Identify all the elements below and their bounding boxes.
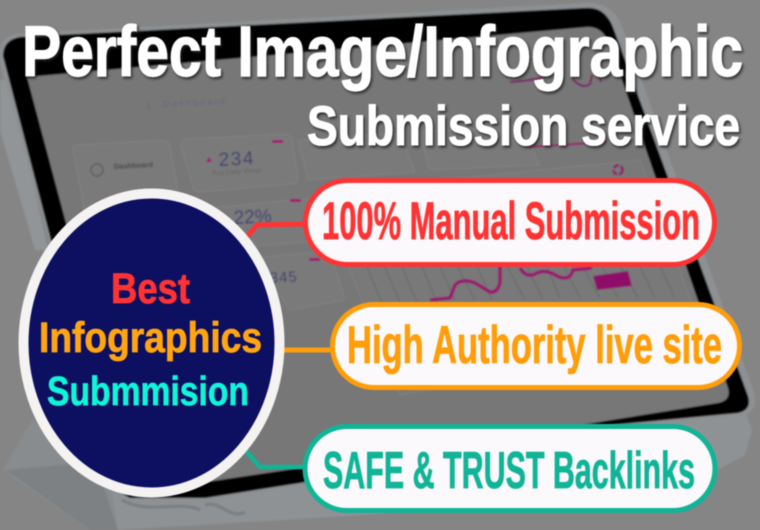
connector: orange: [282, 348, 333, 352]
dashboard heading: Dashboard: [163, 96, 225, 110]
chart tag: [593, 271, 632, 290]
card values: 345: [269, 269, 298, 287]
connector: red: [246, 224, 306, 238]
refresh icon: [614, 166, 622, 174]
header purple mark: [510, 70, 601, 86]
upper chart line: [527, 142, 607, 147]
card values: Dashboard: [114, 160, 154, 171]
chart line: [430, 262, 592, 300]
card values: Avg Daily Views: [212, 167, 262, 177]
dashboard heading: 1: [146, 100, 152, 111]
badge line: infographics: Infographics: [39, 314, 262, 362]
connector: teal: [246, 451, 305, 467]
badge: best infographics submission: [24, 194, 280, 492]
badge line: submmision: Submmision: [47, 368, 249, 414]
callout: high authority: [332, 304, 740, 388]
card values: 22%: [233, 206, 272, 229]
chart grid: [365, 262, 675, 310]
badge line: best: Best: [111, 265, 190, 313]
callout: manual submission: [306, 180, 714, 264]
dashboard cards: [72, 125, 705, 395]
card values: [91, 140, 320, 287]
title: [22, 13, 743, 157]
card values: 234: [218, 148, 255, 171]
callout: safe and trust: [305, 426, 715, 510]
